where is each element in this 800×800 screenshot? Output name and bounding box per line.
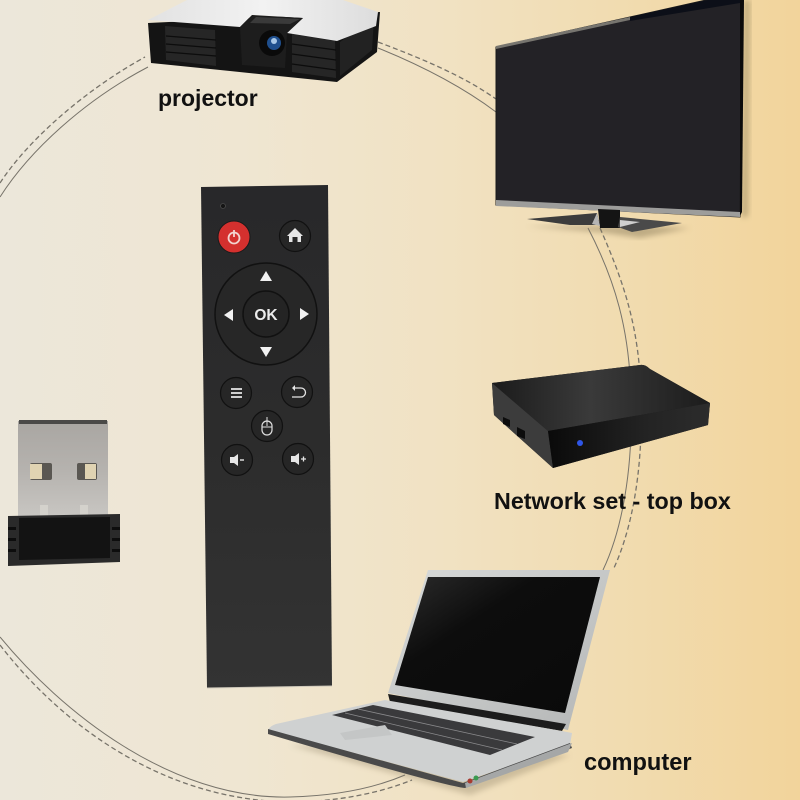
- volume up button: [282, 444, 314, 474]
- mouse button: [252, 410, 282, 442]
- label: projector: projector: [158, 85, 258, 111]
- indicator light: [220, 204, 226, 208]
- label: computer: computer: [584, 750, 692, 776]
- device: laptop computer: [268, 570, 610, 795]
- menu button: [220, 378, 252, 408]
- label: network set-top box: Network set - top box: [494, 488, 731, 514]
- volume down button: [222, 444, 252, 476]
- connection circle lines: [0, 42, 641, 800]
- directional pad: [215, 263, 317, 365]
- power button: [218, 221, 250, 253]
- back button: [282, 376, 312, 408]
- device: television: [496, 0, 750, 238]
- directional pad: OK: [254, 307, 278, 324]
- device: network set-top box: [492, 365, 710, 468]
- device: USB receiver: [8, 420, 120, 566]
- device: projector: [148, 0, 380, 82]
- home button: [280, 220, 310, 252]
- remote control: [201, 185, 332, 688]
